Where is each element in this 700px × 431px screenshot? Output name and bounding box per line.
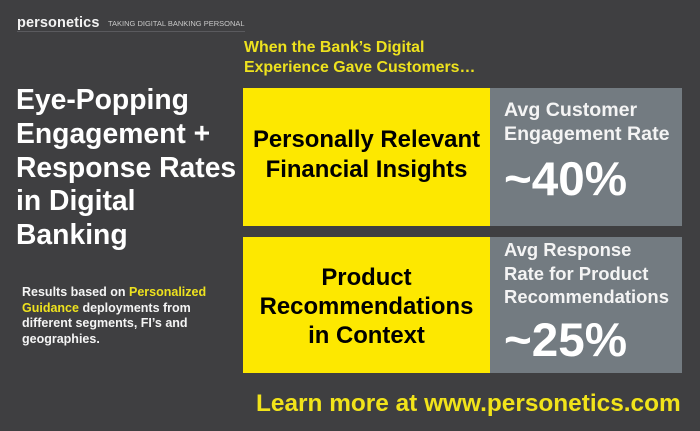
response label: Rate for Product <box>504 262 648 284</box>
recommendations label: Recommendations <box>260 293 473 320</box>
recommendations label: in Context <box>308 322 425 349</box>
response label: Avg Response <box>504 239 631 260</box>
response value: ~25% <box>504 314 627 367</box>
yellow box: recommendations <box>243 237 490 373</box>
yellow heading: Experience Gave Customers… <box>244 59 475 76</box>
logo: personetics: personetics <box>17 15 100 31</box>
footnote text <box>22 285 206 346</box>
engagement label <box>504 99 670 145</box>
footnote text: Guidance deployments from <box>22 301 191 315</box>
footnote text: geographies. <box>22 332 100 346</box>
engagement label: Avg Customer <box>504 99 637 121</box>
main title: in Digital <box>16 184 135 216</box>
recommendations label: Product <box>321 264 412 291</box>
yellow heading: When the Bank’s Digital <box>244 39 424 56</box>
response label <box>504 239 669 307</box>
panel: insights row <box>243 88 682 226</box>
insights label: Personally Relevant <box>253 126 480 153</box>
main title: Engagement + <box>16 117 210 149</box>
engagement value: ~40% <box>504 153 627 206</box>
yellow box: insights <box>243 88 490 226</box>
main title: Banking <box>16 218 128 250</box>
recommendations label <box>260 264 473 349</box>
panel: recommendations row <box>243 237 682 373</box>
main title: Response Rates <box>16 151 236 183</box>
insights label <box>253 126 480 183</box>
yellow heading <box>244 39 475 76</box>
insights label: Financial Insights <box>266 156 467 183</box>
main title <box>16 83 236 250</box>
footnote text: Results based on Personalized <box>22 285 206 299</box>
engagement label: Engagement Rate <box>504 123 670 145</box>
footnote text: different segments, FI’s and <box>22 316 188 330</box>
call to action: Learn more at www.personetics.com <box>256 390 681 417</box>
main title: Eye-Popping <box>16 83 189 115</box>
header: logo and tagline <box>17 14 245 32</box>
response label: Recommendations <box>504 286 669 307</box>
tagline: TAKING DIGITAL BANKING PERSONAL <box>108 19 245 28</box>
